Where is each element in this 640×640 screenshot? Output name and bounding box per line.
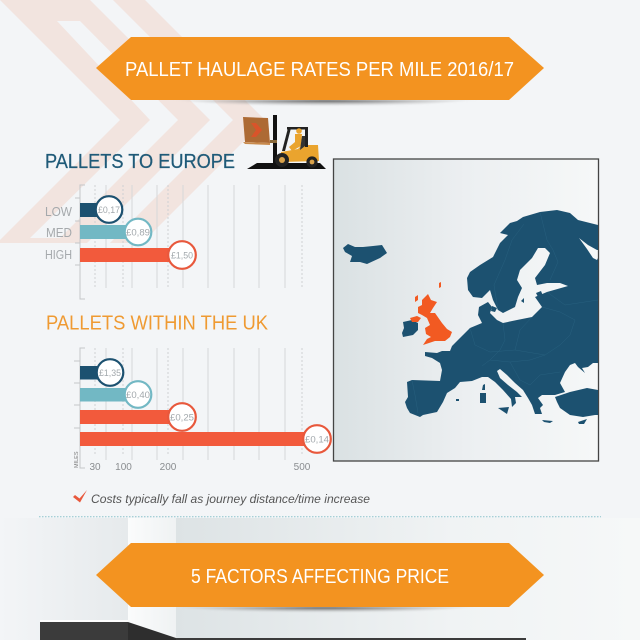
label: low: LOW xyxy=(45,204,73,219)
dark panel top xyxy=(40,620,526,640)
map: mainland Europe xyxy=(405,210,598,417)
bar: 100 miles xyxy=(80,381,151,408)
map: Shetland and Hebrides xyxy=(415,282,441,302)
lower section background xyxy=(0,518,640,640)
label: high: HIGH xyxy=(45,247,72,262)
map: Turkey xyxy=(555,388,598,417)
map: Ireland xyxy=(402,320,418,337)
bar: high: £1,50 xyxy=(171,250,193,262)
bar: high xyxy=(80,241,196,269)
map: Mediterranean islands xyxy=(456,291,587,424)
axis labels xyxy=(89,462,311,473)
bar: 200 miles xyxy=(80,403,196,431)
bar: low xyxy=(80,196,122,223)
heading: pallets to Europe: PALLETS TO EUROPE xyxy=(45,150,235,173)
background chevrons xyxy=(0,0,262,243)
top banner xyxy=(96,37,544,112)
bar: low: £0,17 xyxy=(98,205,120,216)
axis labels: 30 xyxy=(89,462,101,473)
bar: 100 miles: £0,40 xyxy=(126,390,150,401)
background chevron gap xyxy=(30,21,178,238)
bar: 200 miles: £0,25 xyxy=(170,412,194,424)
label: med: MED xyxy=(46,225,72,240)
note: costs fall: Costs typically fall as journey distance/time increase xyxy=(91,492,370,506)
icon: forklift xyxy=(243,115,326,169)
map: Northern Ireland xyxy=(410,316,421,322)
bar: med xyxy=(80,219,151,245)
bar: med: £0,89 xyxy=(126,228,150,238)
top banner: PALLET HAULAGE RATES PER MILE 2016/17 xyxy=(125,58,514,81)
chart: pallets to Europe xyxy=(45,185,302,299)
bar: 500 miles: £0,14 xyxy=(305,434,329,446)
map: Great Britain xyxy=(418,294,452,345)
axis title: miles: MILES xyxy=(74,451,80,468)
bar: 30 miles xyxy=(80,359,123,386)
map panel xyxy=(334,159,598,461)
axis labels: 500 xyxy=(294,462,311,473)
bar: 30 miles: £1,35 xyxy=(99,368,121,379)
chart: pallets within the UK xyxy=(74,348,331,473)
axis labels: 100 xyxy=(115,462,132,473)
bar: 500 miles xyxy=(80,425,331,453)
second banner xyxy=(96,543,544,618)
axis labels: 200 xyxy=(160,462,177,473)
second banner: 5 FACTORS AFFECTING PRICE xyxy=(191,565,449,588)
icon: check mark xyxy=(73,490,87,502)
heading: pallets within the UK: PALLETS WITHIN THE UK xyxy=(46,312,268,334)
map: Iceland xyxy=(343,244,387,264)
map: country borders xyxy=(412,212,598,413)
